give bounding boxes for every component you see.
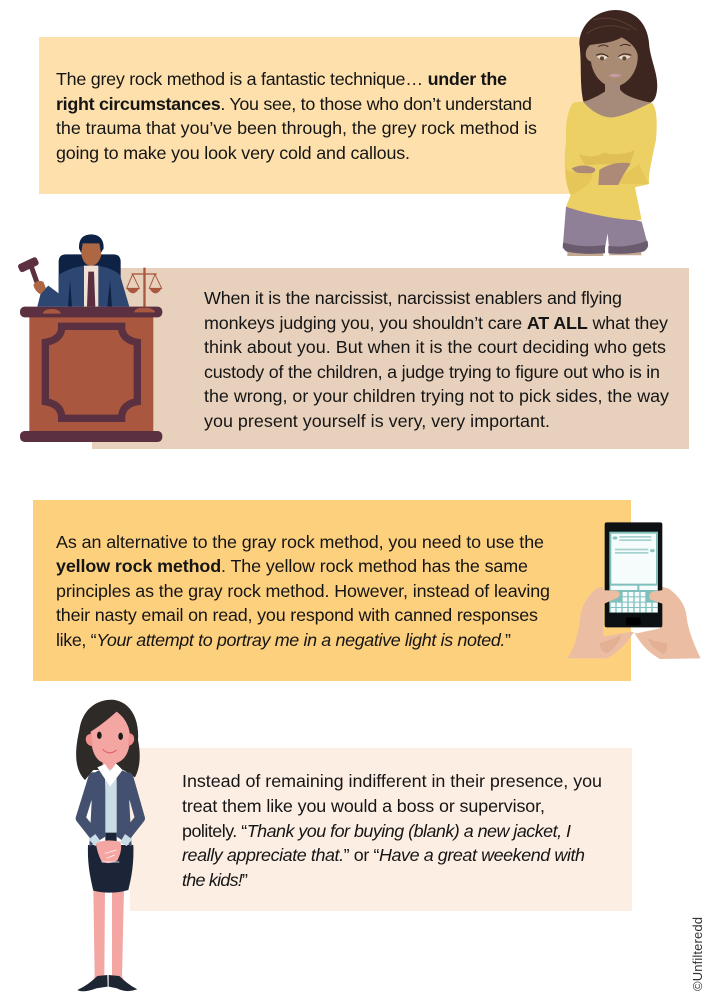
text block: polite interaction: Instead of remaining indifferent in their presence, you — [182, 771, 602, 791]
icon: scales of justice — [127, 268, 162, 308]
text block: court custody: custody of the children, a judge trying to figure out who is in — [204, 362, 660, 382]
text block: polite interaction — [182, 771, 602, 890]
text block: court custody: monkeys judging you, you shouldn’t care AT ALL what they — [204, 313, 668, 333]
jacket — [81, 777, 140, 836]
text block: grey rock intro: The grey rock method is a fantastic technique… under the — [56, 69, 507, 89]
text block: polite interaction: politely. “Thank you for buying (blank) a new jacket, I — [182, 821, 571, 841]
text block: court custody — [204, 288, 669, 431]
text block: grey rock intro — [56, 69, 537, 163]
icon: gavel — [17, 256, 40, 283]
text block: court custody: think about you. But when it is the court deciding who gets — [204, 337, 666, 357]
panel: polite interaction — [130, 748, 632, 911]
icon: judge at bench — [17, 234, 162, 442]
text block: grey rock intro: going to make you look very cold and callous. — [56, 143, 410, 163]
text block: yellow rock method: like, “Your attempt to portray me in a negative light is noted.” — [56, 630, 511, 650]
text block: yellow rock method: principles as the gray rock method. However, instead of leaving — [56, 581, 550, 601]
panel: yellow rock method — [33, 500, 631, 681]
text block: yellow rock method: yellow rock method. The yellow rock method has the same — [56, 556, 528, 576]
text block: court custody: the wrong, or your children trying not to pick sides, the way — [204, 386, 669, 406]
text block: polite interaction: really appreciate that.” or “Have a great weekend with — [182, 845, 585, 865]
bench — [29, 315, 153, 435]
icon: woman with crossed arms — [563, 10, 657, 256]
text block: grey rock intro: right circumstances. You see, to those who don’t understand — [56, 94, 532, 114]
icon: businesswoman — [76, 700, 140, 991]
text block: yellow rock method: As an alternative to the gray rock method, you need to use the — [56, 532, 544, 552]
text block: polite interaction: treat them like you would a boss or supervisor, — [182, 796, 545, 816]
text block: court custody: When it is the narcissist, narcissist enablers and flying — [204, 288, 622, 308]
text block: polite interaction: the kids!” — [182, 870, 248, 890]
credit: copyright: ©Unfilteredd — [690, 917, 705, 991]
legs — [567, 248, 641, 256]
text block: yellow rock method: their nasty email on read, you respond with canned responses — [56, 605, 538, 625]
text block: grey rock intro: the trauma that you’ve been through, the grey rock method is — [56, 118, 537, 138]
text block: court custody: you present yourself is very, very important. — [204, 411, 550, 431]
panel: grey rock intro — [39, 37, 584, 194]
panel: court custody — [92, 268, 689, 449]
text block: yellow rock method — [56, 532, 550, 650]
icon: hands holding phone — [567, 522, 701, 659]
